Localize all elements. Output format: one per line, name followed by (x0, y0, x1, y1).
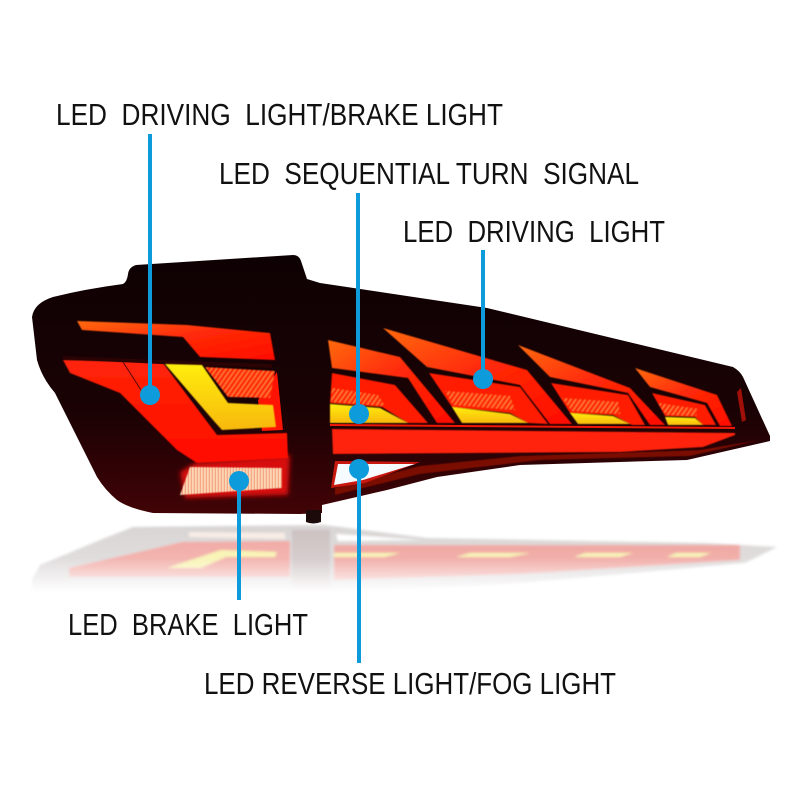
left lamp: red side piece (258, 372, 283, 431)
left lamp: main red L-shaped light (63, 360, 288, 463)
label: LED brake light: LED BRAKE LIGHT (68, 607, 308, 642)
long red light bar (332, 429, 735, 454)
left lamp: dark divider (63, 356, 272, 368)
reflection of the tail light (32, 525, 777, 594)
left lamp: thin dark crease (123, 362, 141, 390)
leader: reverse/fog light (349, 459, 369, 663)
segment 4 (635, 368, 732, 426)
leader: sequential turn signal (349, 193, 369, 424)
left lamp: brake light grid (180, 467, 282, 495)
segment 1 (328, 340, 455, 423)
label: LED sequential turn signal: LED SEQUENTIAL TURN SIGNAL (219, 156, 639, 191)
left lamp: upper red bar (77, 321, 275, 360)
left lamp: red glow edge (180, 440, 760, 498)
small side marker (737, 388, 746, 422)
leader: brake light (229, 471, 249, 600)
left lamp: hatched red panel (205, 367, 275, 398)
left lamp: amber turn signal (165, 364, 276, 430)
segment 2 (383, 328, 572, 424)
mounting post (306, 510, 321, 524)
infographic: LED tail light diagram (32, 103, 776, 694)
thin red line above bar (330, 424, 735, 429)
tail light housing (32, 255, 770, 514)
label: LED driving light / brake light: LED DRIVING LIGHT/BRAKE LIGHT (56, 97, 503, 132)
leader: driving/brake light (140, 134, 160, 405)
leader: driving light (473, 250, 493, 389)
label: LED driving light: LED DRIVING LIGHT (403, 214, 665, 249)
segment 3 (518, 345, 665, 425)
reverse and fog light (331, 461, 420, 488)
label: LED reverse light / fog light: LED REVERSE LIGHT/FOG LIGHT (204, 666, 616, 701)
